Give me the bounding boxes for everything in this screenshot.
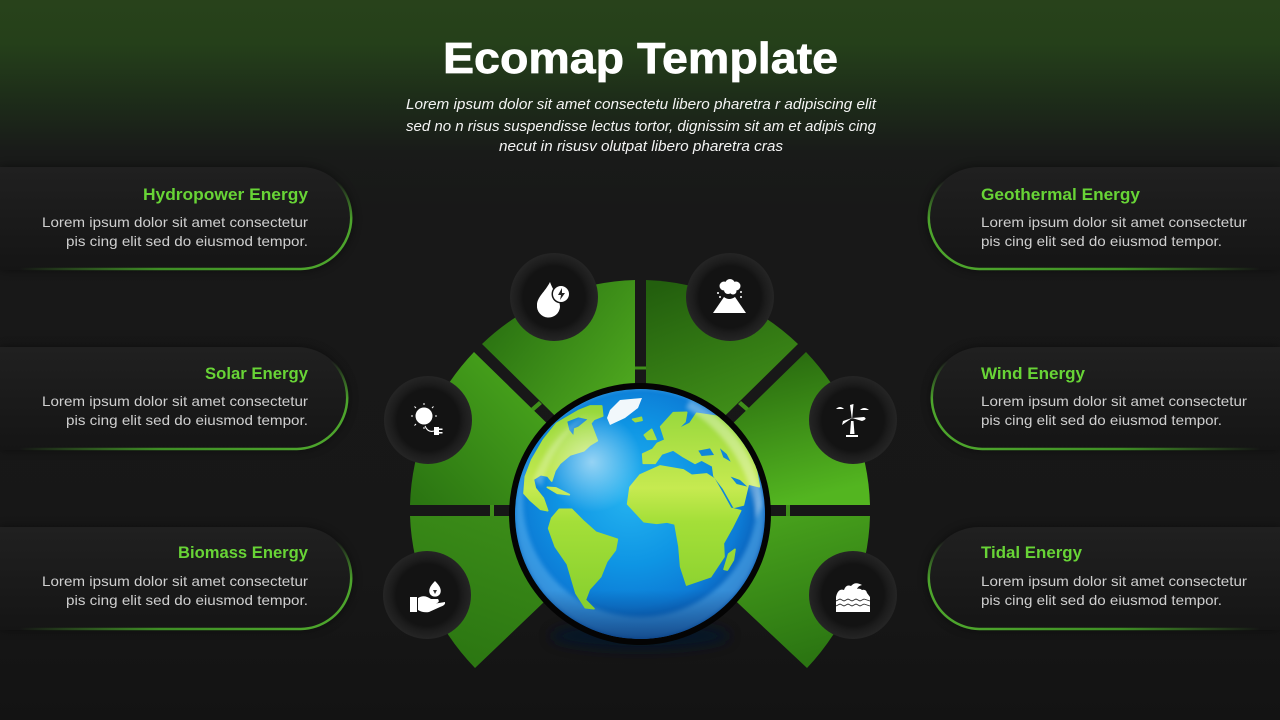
panel: wind energy: Lorem ipsum dolor sit amet consectetur: [981, 393, 1247, 409]
africa: [628, 466, 741, 585]
panel: geothermal energy: Geothermal Energy: [981, 185, 1141, 204]
black sea: [698, 448, 714, 456]
panel: biomass energy: Biomass Energy: [178, 543, 309, 562]
panel: biomass energy: [0, 527, 352, 630]
caspian sea: [720, 448, 731, 462]
panel: solar energy: Lorem ipsum dolor sit amet consectetur: [42, 393, 308, 409]
icon node: geothermal: [686, 253, 774, 341]
icon node: biomass: [383, 551, 471, 639]
south america: [549, 509, 617, 609]
icon node: tidal: [809, 551, 897, 639]
panel: hydropower energy: Hydropower Energy: [143, 185, 309, 204]
panel: geothermal energy: pis cing elit sed do eiusmod tempor.: [981, 233, 1222, 249]
panel: tidal energy: pis cing elit sed do eiusmod tempor.: [981, 592, 1222, 608]
globe: [509, 383, 771, 650]
segmented green wheel: [410, 280, 870, 668]
iceland: [633, 417, 642, 422]
panel: tidal energy: Tidal Energy: [981, 543, 1083, 562]
panel: solar energy: pis cing elit sed do eiusmod tempor.: [66, 412, 308, 428]
panel: hydropower energy: [0, 167, 352, 270]
eurasia: [643, 412, 759, 507]
persian gulf: [731, 477, 747, 487]
panel: wind energy: Wind Energy: [981, 364, 1086, 383]
panel: geothermal energy: [928, 167, 1280, 270]
hudson bay: [567, 417, 587, 435]
panel: biomass energy: Lorem ipsum dolor sit amet consectetur: [42, 573, 308, 589]
madagascar: [724, 549, 735, 570]
icon node: wind: [809, 376, 897, 464]
panel: wind energy: pis cing elit sed do eiusmod tempor.: [981, 412, 1222, 428]
title: Ecomap Template: [443, 34, 838, 83]
icon node: hydropower: [510, 253, 598, 341]
panel: tidal energy: Lorem ipsum dolor sit amet consectetur: [981, 573, 1247, 589]
panel: solar energy: [0, 347, 348, 450]
panel: tidal energy: [928, 527, 1280, 630]
north america: [524, 406, 603, 511]
subtitle text: sed no n risus suspendisse lectus tortor, dignissim sit am et adipis cing: [406, 118, 877, 135]
panel: solar energy: Solar Energy: [205, 364, 309, 383]
greenland: [607, 398, 642, 425]
subtitle text: necut in risusv olutpat libero pharetra cras: [499, 138, 783, 155]
panel: geothermal energy: Lorem ipsum dolor sit amet consectetur: [981, 214, 1247, 230]
caribbean: [547, 487, 569, 495]
panel: hydropower energy: pis cing elit sed do eiusmod tempor.: [66, 233, 308, 249]
panel: wind energy: [930, 347, 1280, 450]
panel: biomass energy: pis cing elit sed do eiusmod tempor.: [66, 592, 308, 608]
subtitle text: [406, 96, 877, 155]
uk: [644, 429, 656, 439]
icon node: solar: [384, 376, 472, 464]
subtitle text: Lorem ipsum dolor sit amet consectetu libero pharetra r adipiscing elit: [406, 96, 877, 113]
panel: hydropower energy: Lorem ipsum dolor sit amet consectetur: [42, 214, 308, 230]
